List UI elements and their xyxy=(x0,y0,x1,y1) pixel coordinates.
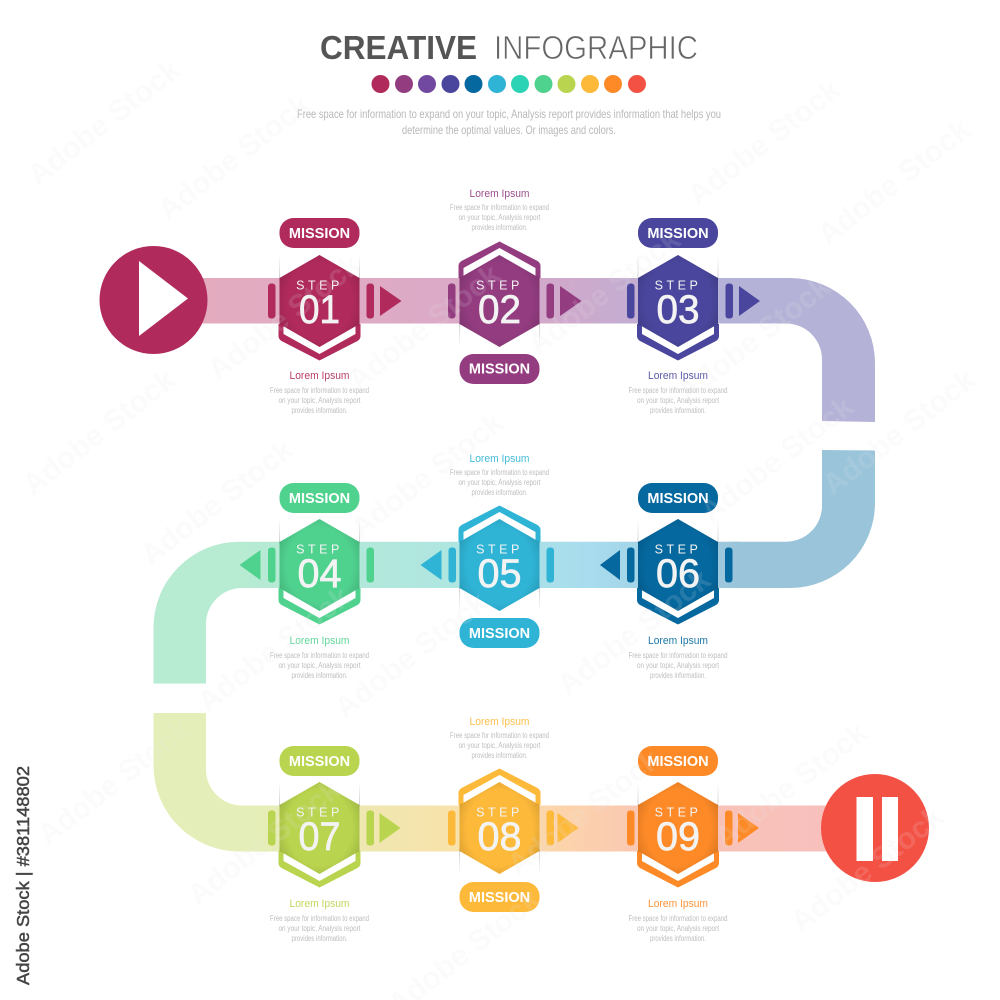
mission pill: MISSION xyxy=(469,890,530,906)
description: Lorem Ipsum xyxy=(290,898,350,910)
description: Free space for information to expand xyxy=(270,386,369,395)
step 09 xyxy=(627,746,759,943)
description: Free space for information to expand xyxy=(628,386,728,395)
step 07 xyxy=(268,746,400,943)
stock watermark pattern: Adobe Stock xyxy=(785,800,950,939)
path segment: bottom row xyxy=(250,806,840,852)
step label: 04 xyxy=(298,552,342,596)
description: Lorem Ipsum xyxy=(290,635,350,647)
description: on your topic, Analysis report xyxy=(637,924,720,933)
description: provides information. xyxy=(472,488,528,497)
stock watermark pattern: Adobe Stock xyxy=(329,586,494,725)
mission pill xyxy=(638,218,718,248)
connector bars and arrow xyxy=(268,284,402,318)
step 02 xyxy=(448,188,582,384)
stock watermark pattern: Adobe Stock xyxy=(682,73,847,212)
step label: STEP xyxy=(655,278,701,292)
description: provides information. xyxy=(650,671,706,680)
step 06 xyxy=(600,483,732,680)
hexagon badge xyxy=(637,519,719,624)
stock watermark pattern: Adobe Stock xyxy=(152,88,317,227)
mission pill xyxy=(460,618,540,648)
step label: STEP xyxy=(476,278,523,292)
description: Free space for information to expand xyxy=(450,468,549,477)
step label: STEP xyxy=(655,806,701,820)
connector bars and arrow xyxy=(627,810,759,846)
stock watermark pattern: Adobe Stock xyxy=(182,773,347,912)
path segment: lower left bend xyxy=(154,713,300,852)
connector bars and arrow xyxy=(448,284,582,318)
stock id stamp: Adobe Stock | #381148802 xyxy=(13,766,33,985)
mission pill xyxy=(460,354,540,384)
step label: 06 xyxy=(656,552,700,596)
description: Lorem Ipsum xyxy=(648,635,708,647)
stock watermark pattern: Adobe Stock xyxy=(342,258,507,397)
stock watermark pattern: Adobe Stock xyxy=(502,743,667,882)
description: provides information. xyxy=(292,934,348,943)
mission pill xyxy=(638,483,718,513)
hexagon badge xyxy=(458,768,540,874)
description: provides information. xyxy=(650,406,706,415)
description xyxy=(270,635,369,680)
step 04 xyxy=(240,483,374,680)
mission pill xyxy=(460,882,540,912)
description: provides information. xyxy=(292,406,348,415)
mission pill xyxy=(280,746,360,776)
description: Free space for information to expand xyxy=(628,914,728,923)
description: on your topic, Analysis report xyxy=(278,396,361,405)
connector bars and arrow xyxy=(600,548,732,582)
connector bars and arrow xyxy=(268,810,400,846)
description: Lorem Ipsum xyxy=(470,188,530,200)
description: on your topic, Analysis report xyxy=(458,741,541,750)
description: on your topic, Analysis report xyxy=(458,213,541,222)
connector bars and arrow xyxy=(448,810,578,846)
step label: STEP xyxy=(476,542,523,556)
pause button xyxy=(821,774,929,882)
description: Free space for information to expand xyxy=(450,731,549,740)
mission pill: MISSION xyxy=(289,491,350,507)
step label: 08 xyxy=(478,815,522,859)
mission pill: MISSION xyxy=(289,754,350,770)
connector bars and arrow xyxy=(240,548,374,582)
description xyxy=(628,898,728,943)
description: Lorem Ipsum xyxy=(648,370,708,382)
description: Free space for information to expand xyxy=(628,651,728,660)
step 01 xyxy=(268,218,402,415)
step label: 01 xyxy=(299,288,340,332)
mission pill: MISSION xyxy=(469,362,530,378)
title: INFOGRAPHIC xyxy=(494,29,698,66)
stock watermark pattern: Adobe Stock xyxy=(812,113,977,252)
step label: STEP xyxy=(296,806,343,820)
stock watermark pattern: Adobe Stock xyxy=(672,270,837,409)
hexagon badge xyxy=(278,519,360,624)
step label: 07 xyxy=(298,815,340,859)
stock watermark pattern: Adobe Stock xyxy=(817,363,982,502)
description: Free space for information to expand xyxy=(270,651,369,660)
description: Free space for information to expand xyxy=(450,203,549,212)
mission pill: MISSION xyxy=(289,226,350,242)
stock watermark pattern: Adobe Stock xyxy=(695,390,860,529)
stock watermark pattern: Adobe Stock xyxy=(32,713,197,852)
mission pill: MISSION xyxy=(647,754,709,770)
description: provides information. xyxy=(650,934,706,943)
step label: 03 xyxy=(656,288,700,332)
description xyxy=(450,716,549,760)
intro text: Free space for information to expand on your topic, Analysis report provides information that helps you xyxy=(297,107,721,121)
description: on your topic, Analysis report xyxy=(637,661,720,670)
path segment: middle row xyxy=(153,542,740,684)
description: provides information. xyxy=(472,223,528,232)
hexagon badge xyxy=(458,506,540,611)
description: provides information. xyxy=(292,671,348,680)
intro text: determine the optimal values. Or images and colors. xyxy=(402,123,616,137)
stock watermark pattern: Adobe Stock xyxy=(202,248,367,387)
description: Lorem Ipsum xyxy=(470,716,530,728)
description: on your topic, Analysis report xyxy=(278,924,361,933)
description xyxy=(270,898,369,943)
description: on your topic, Analysis report xyxy=(637,396,720,405)
description: Lorem Ipsum xyxy=(290,370,350,382)
mission pill: MISSION xyxy=(647,491,709,507)
hexagon badge xyxy=(458,242,540,347)
description xyxy=(450,188,549,232)
stock watermark pattern: Adobe Stock xyxy=(345,406,510,545)
path segment: top row xyxy=(200,278,875,422)
stock watermark pattern: Adobe Stock xyxy=(552,563,717,702)
description: Lorem Ipsum xyxy=(648,898,708,910)
description: Free space for information to expand xyxy=(270,914,369,923)
mission pill xyxy=(280,218,360,248)
mission pill: MISSION xyxy=(647,226,709,242)
hexagon badge xyxy=(637,255,719,360)
connector bars and arrow xyxy=(420,548,554,582)
connector bars and arrow xyxy=(627,284,760,318)
mission pill xyxy=(638,746,718,776)
play button xyxy=(100,246,208,354)
stock watermark pattern: Adobe Stock xyxy=(22,53,187,192)
description: Lorem Ipsum xyxy=(470,453,530,465)
description xyxy=(450,453,549,497)
stock watermark pattern: Adobe Stock xyxy=(135,433,300,572)
stock watermark pattern: Adobe Stock xyxy=(709,716,874,855)
step label: STEP xyxy=(296,542,343,556)
step 03 xyxy=(627,218,760,415)
step label: 05 xyxy=(478,552,522,596)
step 05 xyxy=(420,453,554,648)
intro text xyxy=(297,107,721,137)
description xyxy=(628,370,728,415)
path segment: right return xyxy=(730,450,875,588)
description: provides information. xyxy=(472,751,528,760)
step label: STEP xyxy=(655,542,701,556)
title xyxy=(320,29,698,66)
stock watermark pattern: Adobe Stock xyxy=(192,580,357,719)
hexagon badge xyxy=(637,782,719,888)
mission pill xyxy=(280,483,360,513)
step label: 02 xyxy=(478,288,521,332)
step label: STEP xyxy=(476,806,523,820)
step label: STEP xyxy=(296,278,343,292)
colour dots row xyxy=(372,75,646,93)
stock watermark pattern: Adobe Stock xyxy=(17,363,182,502)
title: CREATIVE xyxy=(320,29,477,66)
hexagon badge xyxy=(278,782,360,888)
step label: 09 xyxy=(656,815,700,859)
step 08 xyxy=(448,716,578,912)
description: on your topic, Analysis report xyxy=(458,478,541,487)
description xyxy=(270,370,369,415)
mission pill: MISSION xyxy=(469,626,530,642)
stock watermark pattern: Adobe Stock xyxy=(522,223,687,362)
description: on your topic, Analysis report xyxy=(278,661,361,670)
hexagon badge xyxy=(278,255,360,360)
description xyxy=(628,635,728,680)
